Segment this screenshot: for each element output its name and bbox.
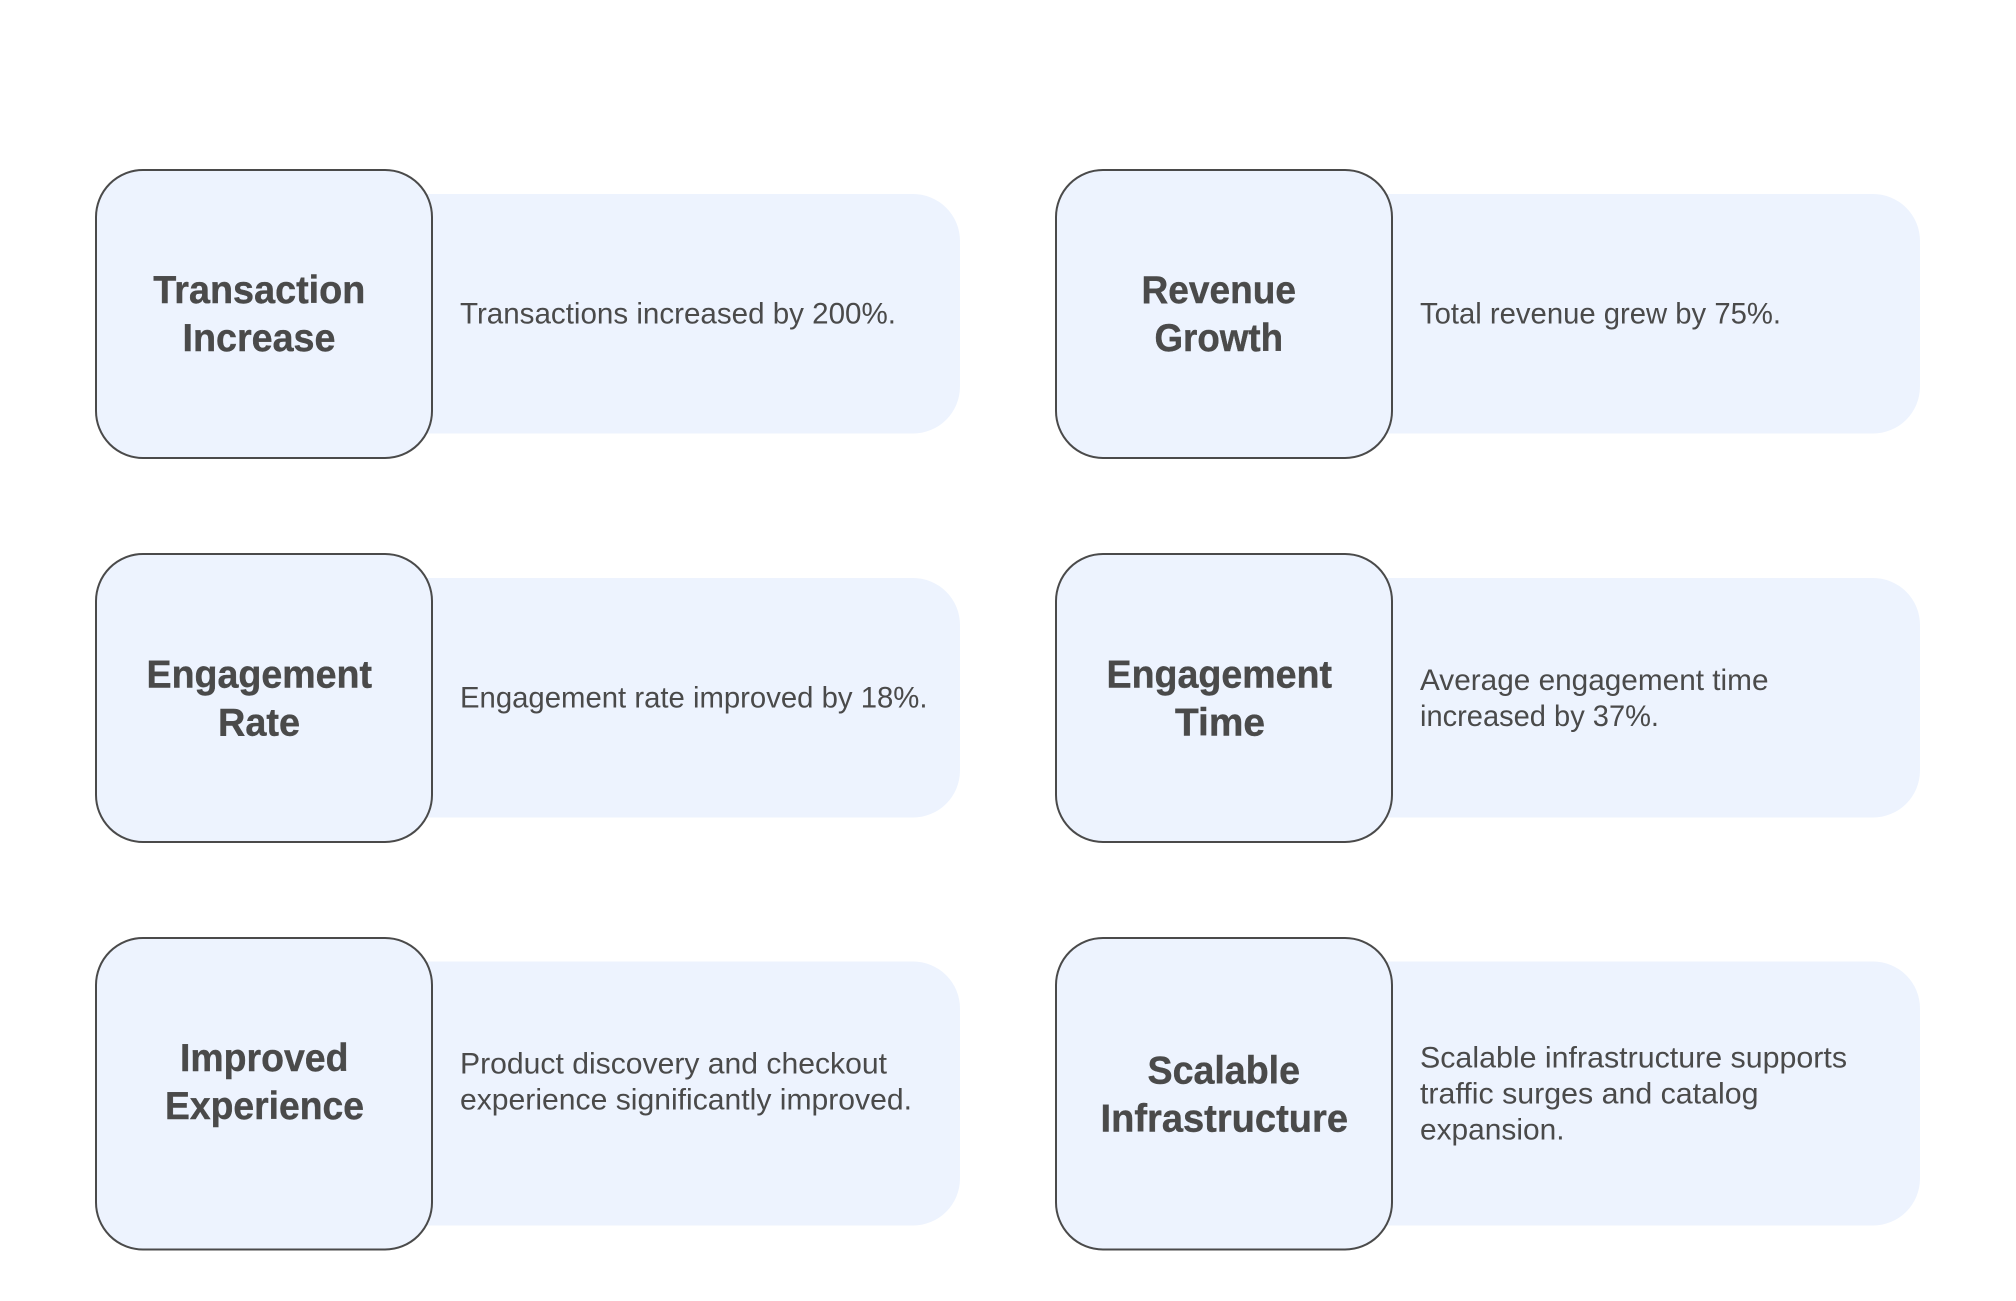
heading: Engagement <box>146 654 372 696</box>
description background <box>1340 194 1920 434</box>
title box <box>1056 170 1392 458</box>
description text: experience significantly improved. <box>460 1084 912 1116</box>
panel: Engagement Rate <box>96 554 960 842</box>
panel: Improved Experience <box>96 938 960 1250</box>
heading: Time <box>1175 702 1265 744</box>
heading: Improved <box>180 1037 348 1080</box>
description background <box>1340 962 1920 1226</box>
description text: expansion. <box>1420 1114 1564 1146</box>
title box <box>96 554 432 842</box>
title box <box>96 938 432 1250</box>
heading: Transaction <box>153 269 365 312</box>
description background <box>380 578 960 818</box>
heading: Growth <box>1154 317 1283 360</box>
description text: traffic surges and catalog <box>1420 1078 1758 1110</box>
heading: Scalable <box>1148 1050 1300 1092</box>
description background <box>380 194 960 434</box>
description background <box>1340 578 1920 818</box>
heading: Infrastructure <box>1100 1098 1348 1140</box>
panel: Scalable Infrastructure <box>1056 938 1920 1250</box>
description text: increased by 37%. <box>1420 700 1659 733</box>
heading: Experience <box>165 1085 364 1128</box>
panel: Transaction Increase <box>96 170 960 458</box>
description text: Engagement rate improved by 18%. <box>460 682 928 714</box>
title box <box>96 170 432 458</box>
heading: Revenue <box>1142 269 1296 312</box>
description text: Product discovery and checkout <box>460 1048 888 1080</box>
panel: Revenue Growth <box>1056 170 1920 458</box>
description text: Scalable infrastructure supports <box>1420 1042 1847 1074</box>
heading: Increase <box>182 317 336 360</box>
description background <box>380 962 960 1226</box>
description text: Transactions increased by 200%. <box>460 298 896 330</box>
description text: Average engagement time <box>1420 664 1768 697</box>
title box <box>1056 938 1392 1250</box>
panel: Engagement Time <box>1056 554 1920 842</box>
heading: Rate <box>218 702 300 744</box>
heading: Engagement <box>1106 654 1332 696</box>
description text: Total revenue grew by 75%. <box>1420 298 1781 330</box>
title box <box>1056 554 1392 842</box>
